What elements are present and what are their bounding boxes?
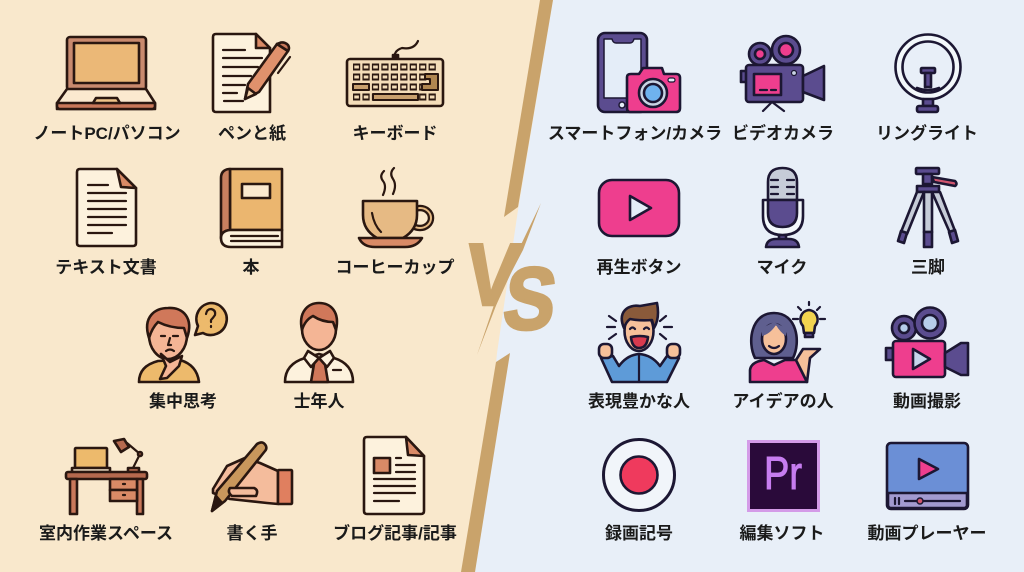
label: keyboard: キーボード xyxy=(352,124,438,143)
VS mark: S xyxy=(499,249,562,348)
label: pen and paper: ペンと紙 xyxy=(218,124,286,143)
icon: expressive person xyxy=(599,303,680,382)
label: writing hand: 書く手 xyxy=(226,523,278,543)
icon: tripod xyxy=(898,168,958,247)
divider: lightning slash xyxy=(477,203,541,355)
VS mark xyxy=(460,226,562,348)
icon: editing software: Pr xyxy=(764,447,802,499)
label: ring light: リングライト xyxy=(876,123,978,143)
icon: play button xyxy=(599,180,679,236)
label: microphone: マイク xyxy=(757,258,807,277)
icon: ring light xyxy=(896,34,960,112)
label: video player: 動画プレーヤー xyxy=(868,524,986,543)
divider: upper gold band xyxy=(504,0,553,217)
label: video camera: ビデオカメラ xyxy=(732,123,834,143)
panel: writing tools xyxy=(33,34,457,543)
label: businessman: 士年人 xyxy=(294,391,344,411)
label: coffee cup: コーヒーカップ xyxy=(336,258,454,277)
icon: book xyxy=(221,169,282,247)
label: smartphone and camera: スマートフォン/カメラ xyxy=(548,124,722,143)
VS mark: V xyxy=(460,226,526,325)
icon: smartphone and camera xyxy=(598,33,680,112)
icon: person with idea xyxy=(750,302,825,382)
label: thinking person: 集中思考 xyxy=(149,392,217,411)
label: tripod: 三脚 xyxy=(911,258,945,277)
icon: video camera xyxy=(741,36,824,111)
label: expressive person: 表現豊かな人 xyxy=(588,391,690,411)
icon: laptop xyxy=(57,37,155,109)
icon: record symbol xyxy=(604,440,674,510)
icon: editing software xyxy=(748,442,818,510)
icon: thinking person xyxy=(139,303,227,382)
panel: video tools xyxy=(548,33,986,543)
icon: businessman xyxy=(285,303,353,382)
label: blog article: ブログ記事/記事 xyxy=(333,523,457,543)
icon: indoor workspace desk xyxy=(66,439,147,514)
icon: coffee cup xyxy=(359,168,431,247)
panel: left background xyxy=(0,0,553,572)
label: video shooting: 動画撮影 xyxy=(893,392,961,411)
label: text document: テキスト文書 xyxy=(55,257,157,277)
label: person with idea: アイデアの人 xyxy=(732,391,834,411)
label: editing software: 編集ソフト xyxy=(740,524,824,543)
icon: writing hand xyxy=(212,442,292,511)
icon: video player xyxy=(887,443,968,509)
icon: text document xyxy=(77,169,136,246)
divider: lower gold band xyxy=(461,353,510,572)
label: laptop: ノートPC/パソコン xyxy=(33,124,181,143)
label: indoor workspace: 室内作業スペース xyxy=(39,524,173,543)
icon: pen and paper xyxy=(213,34,290,112)
label: record symbol: 録画記号 xyxy=(605,524,673,543)
icon: video shoot camera xyxy=(886,308,968,377)
label: book: 本 xyxy=(242,258,260,277)
label: play button: 再生ボタン xyxy=(596,258,682,277)
icon: microphone xyxy=(763,168,803,247)
icon: blog article xyxy=(364,437,424,514)
icon: keyboard xyxy=(347,41,443,106)
